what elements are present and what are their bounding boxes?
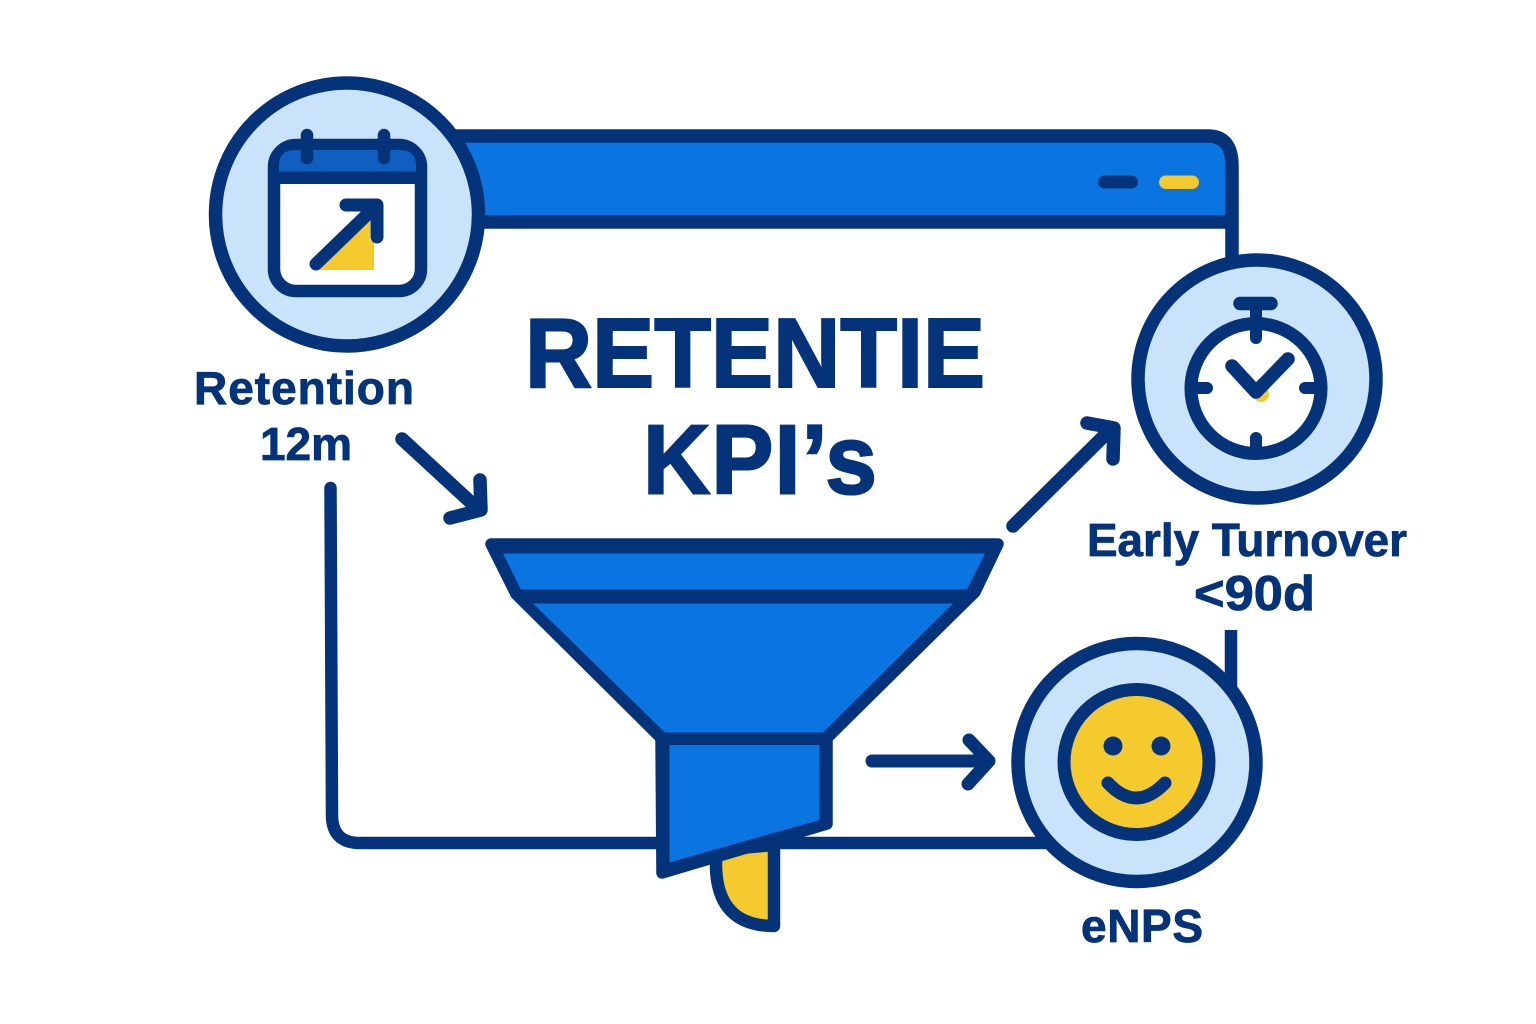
stopwatch ticks (1192, 325, 1320, 452)
label: early turnover period: <90d (1194, 567, 1315, 621)
calendar header divider (274, 172, 421, 184)
stopwatch face (1191, 324, 1321, 454)
growth arrow (316, 205, 377, 264)
label: eNPS: eNPS (1081, 900, 1203, 952)
label: retention: Retention (194, 362, 414, 414)
funnel spout: yellow drop (716, 845, 774, 926)
calendar header (279, 150, 416, 178)
yellow area under arrow (319, 219, 374, 270)
funnel (491, 544, 998, 873)
title: RETENTIE (525, 299, 985, 409)
browser button: dark pill (1098, 176, 1138, 188)
label: retention period: 12m (260, 418, 352, 470)
calendar body (274, 145, 421, 291)
yellow hand accent (1253, 386, 1269, 402)
title (525, 299, 985, 515)
funnel rim (503, 554, 985, 590)
stopwatch stem (1250, 308, 1262, 322)
panel: browser window header (440, 136, 1232, 262)
stopwatch hands (1232, 359, 1288, 392)
arrow: funnel to early turnover (1013, 423, 1114, 526)
icon: calendar with upward arrow (216, 83, 478, 346)
icon: stopwatch (1138, 260, 1376, 498)
label: early turnover: Early Turnover (1087, 514, 1407, 566)
smiley right eye (1152, 736, 1170, 756)
funnel cone (533, 604, 953, 732)
arrow: funnel to eNPS (872, 740, 989, 784)
funnel neck (670, 745, 820, 862)
title second line: KPI’s (643, 405, 877, 515)
smiley left eye (1104, 736, 1122, 756)
connector: early turnover label to eNPS (1225, 630, 1237, 700)
arrow: retention to funnel (402, 439, 481, 518)
smiley mouth (1108, 783, 1165, 798)
connector: retention line to eNPS (330, 488, 1060, 843)
stopwatch top button (1240, 297, 1271, 310)
calendar pegs (307, 135, 384, 158)
icon: smiley (1018, 644, 1256, 882)
label: retention (194, 362, 414, 470)
browser button: yellow pill (1159, 176, 1199, 189)
label: early turnover (1087, 514, 1407, 621)
smiley face (1064, 690, 1209, 834)
